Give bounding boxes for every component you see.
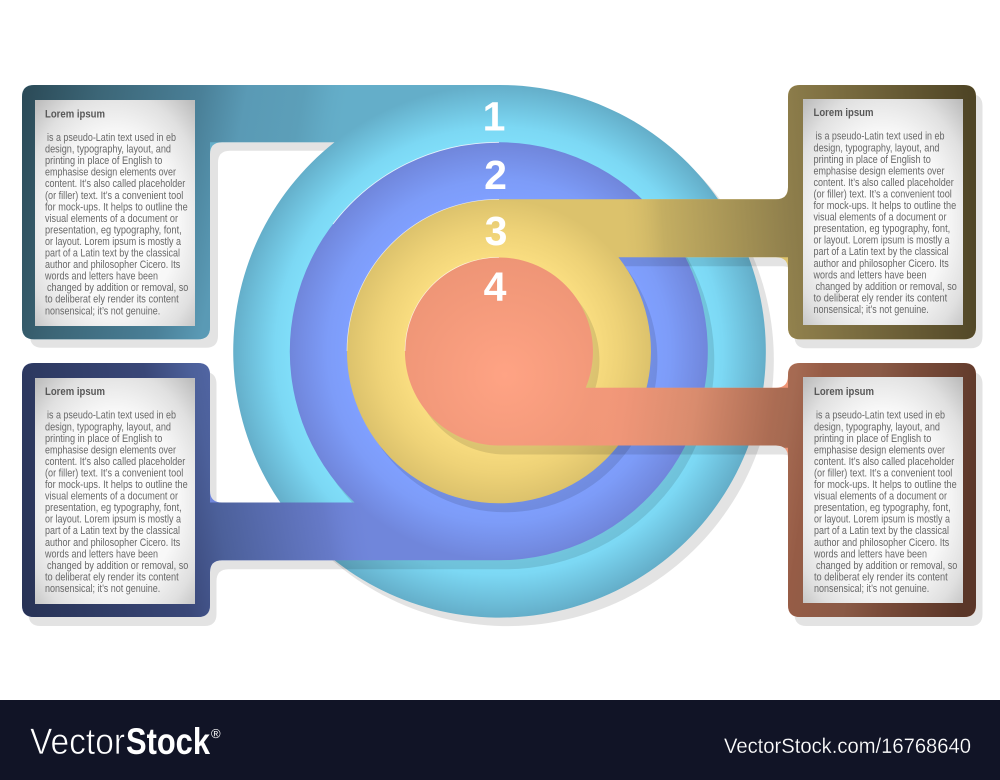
text block top-right: content. It’s also called placeholder: [814, 177, 954, 189]
logo wordmark: Stock: [126, 721, 210, 762]
text block top-right: [813, 107, 957, 316]
text block bottom-left: words and letters have been: [44, 548, 158, 560]
shape 3: yellow ring with top-right panel: [347, 85, 983, 512]
text block top-left: [44, 108, 188, 317]
number 3: 3: [485, 208, 507, 254]
text block top-left: design, typography, layout, and: [45, 144, 171, 156]
text block bottom-left: or layout. Lorem ipsum is mostly a: [45, 514, 181, 526]
orange disc highlight: [405, 257, 499, 351]
text block bottom-right: to deliberat ely render its content: [814, 571, 948, 583]
shape 2: blue ring with bottom-left panel: [22, 142, 714, 626]
text block bottom-left: presentation, eg typography, font,: [45, 502, 182, 514]
text block bottom-left: [44, 386, 188, 595]
shadow of cyan shape: [30, 93, 774, 626]
cyan ring fill: [22, 85, 766, 618]
shape 4: orange disc with bottom-right panel: [405, 257, 982, 626]
text block top-right: words and letters have been: [813, 269, 927, 281]
text block bottom-right: words and letters have been: [813, 548, 927, 560]
text block bottom-left: Lorem ipsum: [45, 386, 105, 398]
text block top-right: nonsensical; it’s not genuine.: [814, 304, 929, 316]
blue ring highlight: [333, 142, 499, 224]
text block top-left: Lorem ipsum: [45, 108, 105, 120]
text block top-left: or layout. Lorem ipsum is mostly a: [45, 236, 181, 248]
text block bottom-right: or layout. Lorem ipsum is mostly a: [814, 514, 950, 526]
logo wordmark: [30, 721, 221, 762]
orange disc fill: [405, 258, 976, 617]
text block top-left: to deliberat ely render its content: [45, 294, 179, 306]
text block bottom-right: nonsensical; it’s not genuine.: [814, 583, 929, 595]
text block bottom-right: Lorem ipsum: [814, 386, 874, 398]
text block bottom-right: author and philosopher Cicero. Its: [814, 537, 949, 549]
text block bottom-left: for mock-ups. It helps to outline the: [45, 479, 188, 491]
logo wordmark: Vector: [30, 721, 125, 762]
text block bottom-right: changed by addition or removal, so: [816, 560, 957, 572]
orange band and panel gradient: [646, 363, 976, 617]
shadow of blue shape: [28, 151, 714, 626]
text block top-right: or layout. Lorem ipsum is mostly a: [814, 235, 950, 247]
text block bottom-right: is a pseudo-Latin text used in eb: [816, 410, 945, 422]
text block bottom-left: emphasise design elements over: [45, 444, 176, 456]
text block top-right: emphasise design elements over: [814, 165, 945, 177]
text block top-left: changed by addition or removal, so: [47, 282, 188, 294]
number 1: 1: [483, 94, 505, 140]
text block bottom-left: printing in place of English to: [45, 433, 162, 445]
text block bottom-left: (or filler) text. It’s a convenient tool: [45, 468, 183, 480]
paper card top-right: [803, 99, 963, 325]
text block top-left: content. It’s also called placeholder: [45, 178, 186, 190]
blue ring fill: [22, 142, 708, 617]
blue band and panel gradient: [22, 363, 348, 617]
text block top-left: is a pseudo-Latin text used in eb: [47, 132, 176, 144]
text block top-right: printing in place of English to: [814, 154, 931, 166]
footer bar: [0, 700, 1000, 780]
text block top-right: to deliberat ely render its content: [814, 292, 947, 304]
text block top-right: visual elements of a document or: [814, 212, 947, 224]
text block top-right: is a pseudo-Latin text used in eb: [816, 131, 945, 143]
text block bottom-right: visual elements of a document or: [814, 491, 947, 503]
text block top-right: design, typography, layout, and: [814, 142, 940, 154]
shadow of orange shape: [411, 266, 982, 626]
text block bottom-left: is a pseudo-Latin text used in eb: [47, 410, 176, 422]
text block top-right: part of a Latin text by the classical: [814, 246, 948, 258]
text block bottom-left: part of a Latin text by the classical: [45, 525, 180, 537]
text block bottom-left: design, typography, layout, and: [45, 421, 171, 433]
yellow ring fill: [347, 85, 976, 503]
text block top-right: presentation, eg typography, font,: [814, 223, 950, 235]
text block top-left: printing in place of English to: [45, 155, 162, 167]
yellow band and panel gradient: [628, 85, 976, 340]
step numbers: [483, 94, 507, 310]
shadow of yellow shape: [353, 94, 983, 512]
text block bottom-right: [813, 386, 957, 595]
image id: VectorStock.com/16768640: [724, 735, 971, 758]
text block top-left: words and letters have been: [44, 271, 158, 283]
text block top-left: visual elements of a document or: [45, 213, 178, 225]
text block top-left: emphasise design elements over: [45, 167, 176, 179]
text block top-left: author and philosopher Cicero. Its: [45, 259, 180, 271]
text block bottom-right: emphasise design elements over: [814, 444, 945, 456]
text block bottom-left: changed by addition or removal, so: [47, 560, 188, 572]
text block top-right: for mock-ups. It helps to outline the: [814, 200, 956, 212]
text block bottom-right: for mock-ups. It helps to outline the: [814, 479, 957, 491]
text block bottom-left: author and philosopher Cicero. Its: [45, 537, 180, 549]
text block top-left: nonsensical; it’s not genuine.: [45, 305, 160, 317]
paper card top-left: [35, 100, 195, 326]
paper card bottom-right: [803, 377, 963, 603]
text block top-left: (or filler) text. It’s a convenient tool: [45, 190, 183, 202]
yellow ring highlight: [347, 199, 499, 351]
text block bottom-left: nonsensical; it’s not genuine.: [45, 583, 160, 595]
text block bottom-right: content. It’s also called placeholder: [814, 456, 955, 468]
text block top-right: author and philosopher Cicero. Its: [814, 258, 949, 270]
text block bottom-left: content. It’s also called placeholder: [45, 456, 186, 468]
text block top-left: for mock-ups. It helps to outline the: [45, 201, 188, 213]
text block top-left: part of a Latin text by the classical: [45, 248, 180, 260]
text block bottom-right: part of a Latin text by the classical: [814, 525, 949, 537]
text block bottom-right: (or filler) text. It’s a convenient tool: [814, 468, 952, 480]
text block top-left: presentation, eg typography, font,: [45, 224, 182, 236]
cyan band and panel gradient: [22, 85, 332, 340]
text block bottom-right: printing in place of English to: [814, 433, 931, 445]
text block bottom-left: visual elements of a document or: [45, 491, 178, 503]
paper card bottom-left: [35, 378, 195, 604]
text block bottom-left: to deliberat ely render its content: [45, 571, 179, 583]
text block top-right: (or filler) text. It’s a convenient tool: [814, 189, 952, 201]
text block top-right: Lorem ipsum: [814, 107, 874, 119]
logo wordmark: ®: [211, 726, 221, 741]
text block top-right: changed by addition or removal, so: [816, 281, 957, 293]
text block bottom-right: presentation, eg typography, font,: [814, 502, 951, 514]
text block bottom-right: design, typography, layout, and: [814, 421, 940, 433]
shape 1: cyan ring with top-left panel: [22, 85, 774, 626]
number 2: 2: [484, 152, 507, 198]
number 4: 4: [484, 264, 507, 310]
